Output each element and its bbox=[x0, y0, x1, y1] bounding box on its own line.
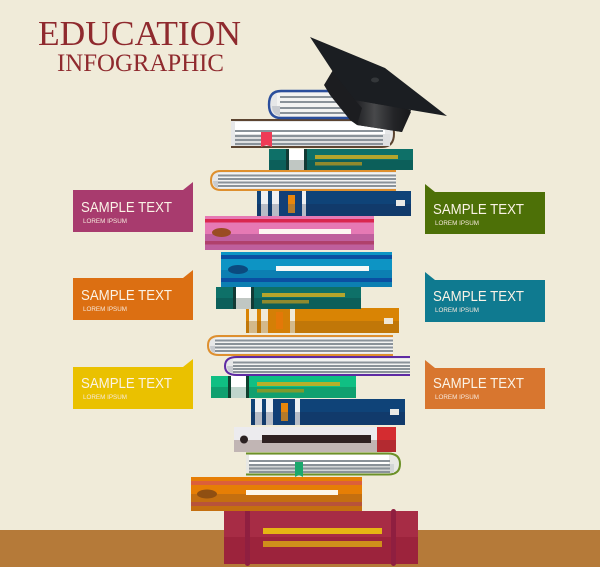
book: brown-edged pages with red bookmark bbox=[231, 120, 394, 147]
book: emerald bbox=[211, 376, 356, 398]
book: navy upper bbox=[257, 191, 411, 216]
title: INFOGRAPHIC bbox=[57, 50, 224, 77]
label: terracotta: LOREM IPSUM bbox=[435, 394, 479, 401]
label: orange: SAMPLE TEXT bbox=[81, 288, 172, 304]
book: purple-edged pages bbox=[225, 357, 410, 375]
label: orange bbox=[73, 270, 193, 320]
label: yellow bbox=[73, 359, 193, 409]
label: green bbox=[425, 184, 545, 234]
book: amber bbox=[246, 308, 399, 333]
title bbox=[38, 14, 241, 77]
title: EDUCATION bbox=[38, 14, 241, 53]
label: terracotta bbox=[425, 360, 545, 409]
label: teal: SAMPLE TEXT bbox=[433, 289, 524, 305]
book: blue wide bbox=[221, 252, 392, 287]
floor bbox=[0, 530, 600, 567]
book: orange-edged pages upper bbox=[211, 171, 396, 190]
book: dark teal mid bbox=[216, 287, 361, 309]
label: orange: LOREM IPSUM bbox=[83, 306, 127, 313]
icon: graduation cap bbox=[310, 37, 447, 132]
label: teal bbox=[425, 272, 545, 322]
book: pink wide bbox=[205, 216, 374, 250]
label: purple bbox=[73, 182, 193, 232]
label: purple: LOREM IPSUM bbox=[83, 218, 127, 225]
book: crimson base bbox=[224, 509, 418, 566]
label: green: SAMPLE TEXT bbox=[433, 202, 524, 218]
book: navy lower bbox=[251, 399, 405, 425]
book: green-edged pages bbox=[246, 454, 400, 477]
label: yellow: LOREM IPSUM bbox=[83, 394, 127, 401]
book: teal upper bbox=[269, 149, 413, 170]
book: orange-edged pages lower bbox=[208, 336, 393, 355]
label: yellow: SAMPLE TEXT bbox=[81, 376, 172, 392]
label: teal: LOREM IPSUM bbox=[435, 307, 479, 314]
label: green: LOREM IPSUM bbox=[435, 220, 479, 227]
label: terracotta: SAMPLE TEXT bbox=[433, 376, 524, 392]
label: purple: SAMPLE TEXT bbox=[81, 200, 172, 216]
book: orange wide bbox=[191, 477, 362, 511]
book: white and red bbox=[234, 427, 396, 452]
book: blue-edged pages top bbox=[269, 91, 350, 118]
